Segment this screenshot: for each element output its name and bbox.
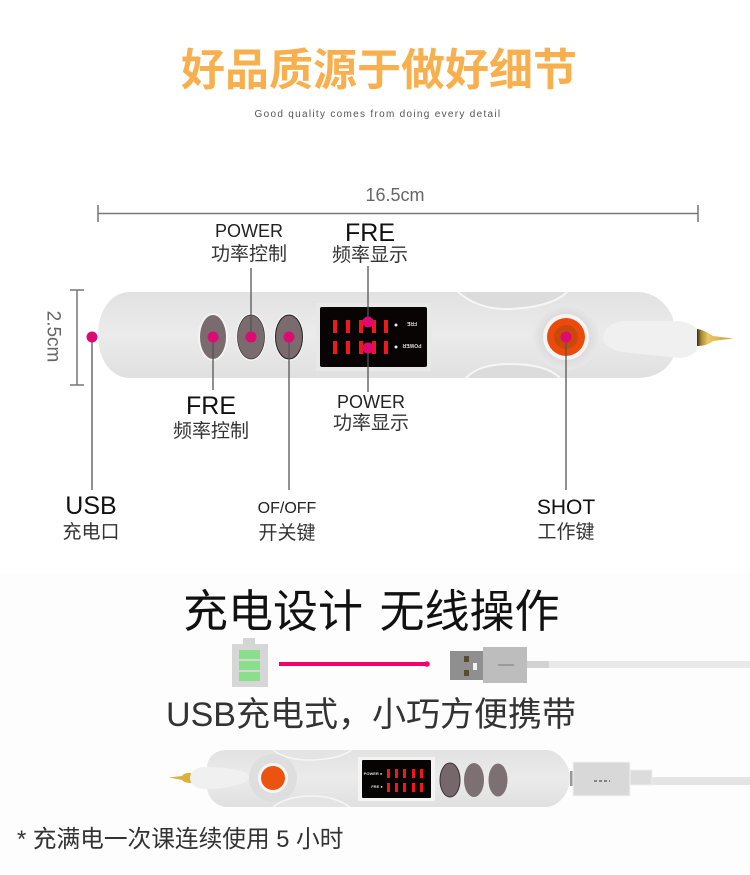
gold tip xyxy=(697,329,733,346)
nozzle xyxy=(603,321,697,358)
label: USB xyxy=(62,492,120,543)
label: ON/OFF: 开关键 xyxy=(258,523,316,544)
title: 好品质源于做好细节 xyxy=(181,46,577,95)
label: FRE display: 频率显示 xyxy=(332,245,408,266)
label: FRE display: FRE xyxy=(345,219,395,247)
second pen: POWER ● xyxy=(364,771,383,776)
icon: battery xyxy=(232,638,268,687)
label: SHOT xyxy=(537,496,595,543)
usb plug and cable xyxy=(652,777,750,785)
orange button xyxy=(249,754,297,802)
second pen: FRE ● xyxy=(371,784,383,789)
label: ON/OFF xyxy=(258,500,316,544)
label: POWER display: POWER xyxy=(337,392,405,412)
callout lines xyxy=(92,266,566,490)
usb cable xyxy=(450,647,750,683)
pen body: FRE xyxy=(406,320,417,326)
lower section background xyxy=(0,574,750,875)
callout dots xyxy=(86,316,572,354)
shot button xyxy=(533,304,599,370)
buttons xyxy=(198,313,228,361)
label: FRE control: FRE xyxy=(186,392,236,420)
label: USB: USB xyxy=(65,492,117,520)
gold tip xyxy=(169,773,191,783)
pink connector xyxy=(279,661,430,667)
display xyxy=(358,757,435,801)
subtitle: Good quality comes from doing every detail xyxy=(255,109,501,120)
label: ON/OFF: OF/OFF xyxy=(258,500,316,517)
display xyxy=(316,303,431,371)
label: USB: 充电口 xyxy=(62,522,120,543)
footnote: * 充满电一次课连续使用 5 小时 xyxy=(17,827,343,853)
dimension lines xyxy=(70,205,698,385)
nozzle xyxy=(190,767,249,789)
label: FRE control: 频率控制 xyxy=(173,421,249,442)
second pen xyxy=(169,750,750,807)
label: POWER display: 功率显示 xyxy=(333,413,409,434)
label: POWER control: POWER xyxy=(215,221,283,241)
label: POWER control xyxy=(211,221,287,265)
label: FRE control xyxy=(173,392,249,442)
pen body xyxy=(98,292,733,378)
label: SHOT: SHOT xyxy=(537,496,595,519)
small buttons xyxy=(440,763,460,797)
label: SHOT: 工作键 xyxy=(537,522,594,543)
label: FRE display xyxy=(332,219,408,266)
subheading: USB charging: USB充电式，小巧方便携带 xyxy=(166,696,576,734)
label: POWER display xyxy=(333,392,409,434)
dimension: length: 16.5cm xyxy=(365,185,425,205)
label: POWER control: 功率控制 xyxy=(211,244,287,265)
body xyxy=(207,750,570,807)
heading: charging design: 充电设计 无线操作 xyxy=(183,586,560,637)
pen body: POWER xyxy=(402,342,421,348)
dimension: height label: 2.5cm xyxy=(42,311,64,362)
